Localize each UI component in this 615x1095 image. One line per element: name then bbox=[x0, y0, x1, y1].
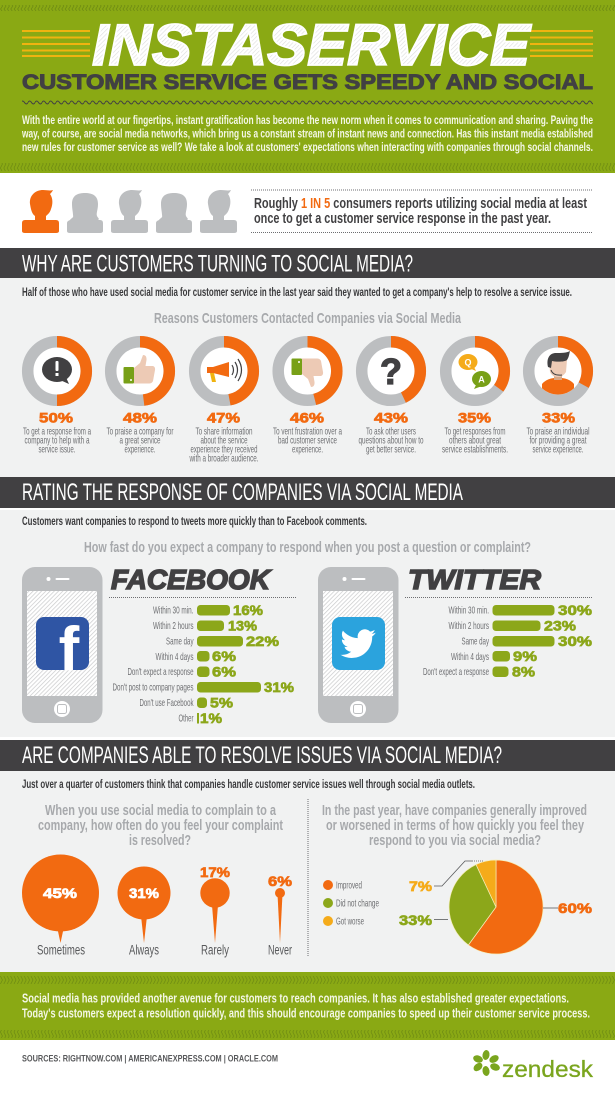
heading: facebook: FACEBOOK bbox=[111, 564, 272, 595]
donut 46% bbox=[273, 342, 342, 456]
donut 47%: about the service bbox=[200, 434, 248, 446]
bar chart: twitter: 30% bbox=[558, 602, 593, 618]
bar chart: twitter: Within 30 min. bbox=[448, 604, 489, 616]
bubble: never: Never bbox=[268, 942, 292, 958]
icon: facebook logo: f bbox=[59, 615, 80, 684]
bar chart: facebook: Don't use Facebook bbox=[140, 697, 194, 709]
footer banner bbox=[0, 972, 615, 1040]
bar chart: twitter: 9% bbox=[513, 648, 538, 664]
icon: facebook logo bbox=[36, 615, 89, 684]
icon: Q and A bubbles bbox=[458, 354, 491, 389]
bar chart: facebook: 5% bbox=[210, 694, 234, 710]
icon: twitter logo bbox=[332, 617, 385, 670]
logo: zendesk bbox=[472, 1049, 594, 1082]
panel: able to resolve issues bbox=[0, 740, 615, 972]
logo: zendesk: zendesk bbox=[502, 1056, 594, 1082]
icon: thumbs up bbox=[124, 355, 155, 384]
donut 50%: service issue. bbox=[38, 444, 76, 456]
left question: When you use social media to complain to a bbox=[45, 802, 276, 819]
bubble: rarely: 17% bbox=[200, 864, 231, 880]
legend bbox=[323, 880, 379, 928]
icon: grey person 2 bbox=[67, 193, 103, 233]
bar chart: twitter: Within 2 hours bbox=[448, 620, 489, 632]
icon: megaphone bbox=[207, 359, 242, 382]
left question: company, how often do you feel your complaint bbox=[38, 817, 283, 834]
bubble: always: Always bbox=[129, 942, 159, 958]
icon: orange person bbox=[22, 190, 59, 233]
legend: Did not change bbox=[336, 898, 379, 910]
bar chart: facebook: 22% bbox=[246, 633, 280, 649]
pie labels: 7% bbox=[409, 878, 433, 894]
sources: SOURCES: RIGHTNOW.COM | AMERICANEXPRESS.COM | ORACLE.COM bbox=[22, 1054, 278, 1064]
people icons: 1 in 5 bbox=[22, 190, 237, 233]
donut 48%: experience. bbox=[124, 444, 156, 456]
title: INSTASERVICE bbox=[92, 13, 532, 78]
donut 48% bbox=[106, 342, 174, 456]
bar chart: facebook: 6% bbox=[212, 664, 237, 680]
bar chart: facebook: Within 2 hours bbox=[153, 620, 194, 632]
bar chart: twitter: 8% bbox=[512, 664, 536, 680]
conclusion text bbox=[22, 990, 590, 1020]
donut 35% bbox=[442, 342, 508, 456]
pie labels bbox=[399, 861, 593, 928]
bar chart: twitter bbox=[423, 602, 593, 680]
bar chart: facebook: Within 30 min. bbox=[153, 604, 194, 616]
donut 48%: To praise a company for bbox=[106, 426, 174, 438]
left question bbox=[38, 802, 283, 849]
panel: rating the response bbox=[0, 477, 615, 737]
donut 50% bbox=[23, 342, 91, 456]
bubble: rarely bbox=[200, 864, 231, 958]
phone: twitter bbox=[318, 567, 398, 723]
bubble: never bbox=[268, 873, 293, 958]
donut 33%: 33% bbox=[542, 410, 576, 426]
donut 48%: a great service bbox=[120, 434, 161, 446]
bar chart: twitter: Don't expect a response bbox=[423, 666, 489, 678]
bar chart: twitter: 30% bbox=[558, 633, 593, 649]
donut 50%: company to help with a bbox=[24, 434, 90, 446]
chart heading: Reasons Customers Contacted Companies via Social Media bbox=[154, 310, 461, 327]
bar chart: facebook: 16% bbox=[233, 602, 264, 618]
bar chart: facebook: Don't post to company pages bbox=[112, 682, 194, 694]
donut 35%: others about great bbox=[449, 434, 501, 446]
icon: zendesk flower bbox=[472, 1049, 501, 1077]
bubble: rarely: Rarely bbox=[201, 942, 229, 958]
header banner bbox=[0, 0, 615, 173]
icon: thumbs down bbox=[292, 358, 323, 387]
legend: Got worse bbox=[336, 916, 364, 928]
donut 47%: with a broader audience. bbox=[189, 452, 258, 464]
bar chart: twitter: 23% bbox=[544, 618, 577, 634]
phone: facebook bbox=[22, 567, 102, 723]
bubble: always: 31% bbox=[129, 885, 160, 901]
donut 43%: questions about how to bbox=[358, 434, 424, 446]
left question: is resolved? bbox=[129, 832, 191, 849]
donut 47%: To share information bbox=[196, 426, 253, 438]
donut 43% bbox=[358, 342, 424, 456]
intro paragraph bbox=[21, 113, 593, 154]
icon: Q and A bubbles: A bbox=[478, 374, 485, 384]
bar chart: facebook: Within 4 days bbox=[156, 651, 194, 663]
subtitle: CUSTOMER SERVICE GETS SPEEDY AND SOCIAL bbox=[22, 71, 593, 94]
bar chart: facebook: Other bbox=[178, 712, 194, 724]
icon: question mark: ? bbox=[380, 351, 402, 392]
bar chart: facebook: 1% bbox=[200, 710, 223, 726]
bubble: always bbox=[118, 866, 170, 958]
donut 46%: 46% bbox=[290, 410, 325, 426]
callout: 1 in 5 bbox=[251, 190, 592, 232]
icon: grey person 5 bbox=[200, 190, 237, 233]
donut 48%: 48% bbox=[123, 410, 158, 426]
donut 47%: experience they received bbox=[190, 444, 258, 456]
bar chart: facebook: 13% bbox=[228, 618, 258, 634]
icon: grey person 4 bbox=[156, 193, 192, 233]
bar chart: facebook bbox=[112, 602, 295, 726]
bubble: never: 6% bbox=[268, 873, 293, 889]
icon: support agent bbox=[542, 351, 574, 395]
bar chart: facebook: Same day bbox=[166, 636, 194, 648]
bar chart: facebook: 6% bbox=[212, 648, 237, 664]
donut 47%: 47% bbox=[207, 410, 241, 426]
donut 43%: get better service. bbox=[366, 444, 416, 456]
bar chart: facebook: 31% bbox=[264, 679, 295, 695]
bubble chart: complaint resolved bbox=[22, 854, 293, 958]
pie labels: 60% bbox=[558, 900, 593, 916]
bar chart: facebook: Don't expect a response bbox=[128, 666, 194, 678]
donut 46%: bad customer service bbox=[278, 434, 337, 446]
bar chart: twitter: Within 4 days bbox=[451, 651, 489, 663]
right question: respond to you via social media? bbox=[369, 832, 541, 849]
donut 47% bbox=[189, 342, 258, 464]
donut 50%: 50% bbox=[39, 410, 74, 426]
donut 35%: 35% bbox=[458, 410, 492, 426]
bar chart: twitter: Same day bbox=[462, 636, 489, 648]
donut 50%: To get a response from a bbox=[23, 426, 91, 438]
donut 46%: To vent frustration over a bbox=[273, 426, 342, 438]
icon: Q and A bubbles: Q bbox=[464, 358, 472, 368]
donut 43%: 43% bbox=[374, 410, 409, 426]
donut 35%: To get responses from bbox=[444, 426, 506, 438]
pie labels: 33% bbox=[399, 912, 433, 928]
panel: why customers turn to social media bbox=[0, 248, 615, 477]
bubble: sometimes: 45% bbox=[43, 885, 78, 901]
heading: twitter: TWITTER bbox=[408, 564, 542, 595]
icon: grey person 3 bbox=[111, 190, 148, 233]
donut 33% bbox=[526, 342, 590, 456]
donut 46%: experience. bbox=[292, 444, 323, 456]
bubble: sometimes: Sometimes bbox=[37, 942, 85, 958]
bubble: sometimes bbox=[22, 854, 99, 958]
donut 43%: To ask other users bbox=[366, 426, 416, 438]
legend: Improved bbox=[336, 880, 362, 892]
donut 35%: service establishments. bbox=[442, 444, 508, 456]
icon: speech bubble bbox=[42, 357, 72, 384]
right question bbox=[322, 802, 587, 849]
section intro text: Customers want companies to respond to tweets more quickly than to Facebook comments. bbox=[22, 514, 367, 528]
pie chart bbox=[449, 860, 543, 954]
